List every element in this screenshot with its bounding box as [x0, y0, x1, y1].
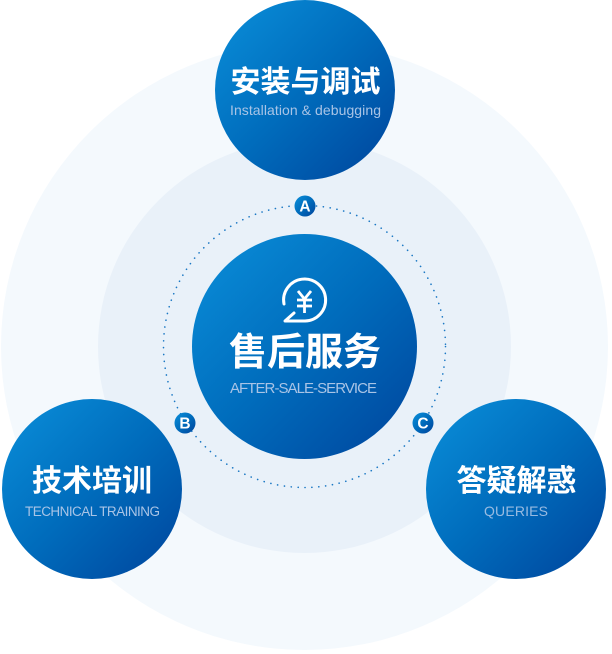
- subtitle: queries: QUERIES: [484, 503, 548, 519]
- subtitle: technical training: TECHNICAL TRAINING: [25, 504, 160, 519]
- badge: C: C: [417, 416, 429, 432]
- circle: technical training: [2, 399, 182, 579]
- circle: queries: [426, 399, 606, 579]
- dotted ring: [164, 206, 446, 488]
- badge: C: [412, 412, 434, 434]
- circle: installation and debugging: [215, 0, 395, 180]
- badge: B: B: [179, 416, 191, 432]
- heading: queries: 答疑解惑: [456, 465, 576, 498]
- heading: technical training: 技术培训: [32, 465, 152, 498]
- middle background circle: [98, 140, 511, 553]
- heading: after-sale service: 售后服务: [229, 332, 381, 374]
- badge: A: [294, 196, 316, 216]
- subtitle: installation and debugging: Installation & debugging: [230, 102, 381, 118]
- heading: installation and debugging: 安装与调试: [230, 66, 380, 99]
- badge: B: [174, 412, 196, 434]
- subtitle: after-sale service: AFTER-SALE-SERVICE: [230, 380, 377, 397]
- icon: yen refund arrow: [284, 279, 326, 321]
- badge: A: A: [299, 198, 311, 216]
- circle: after-sale service: [192, 234, 417, 459]
